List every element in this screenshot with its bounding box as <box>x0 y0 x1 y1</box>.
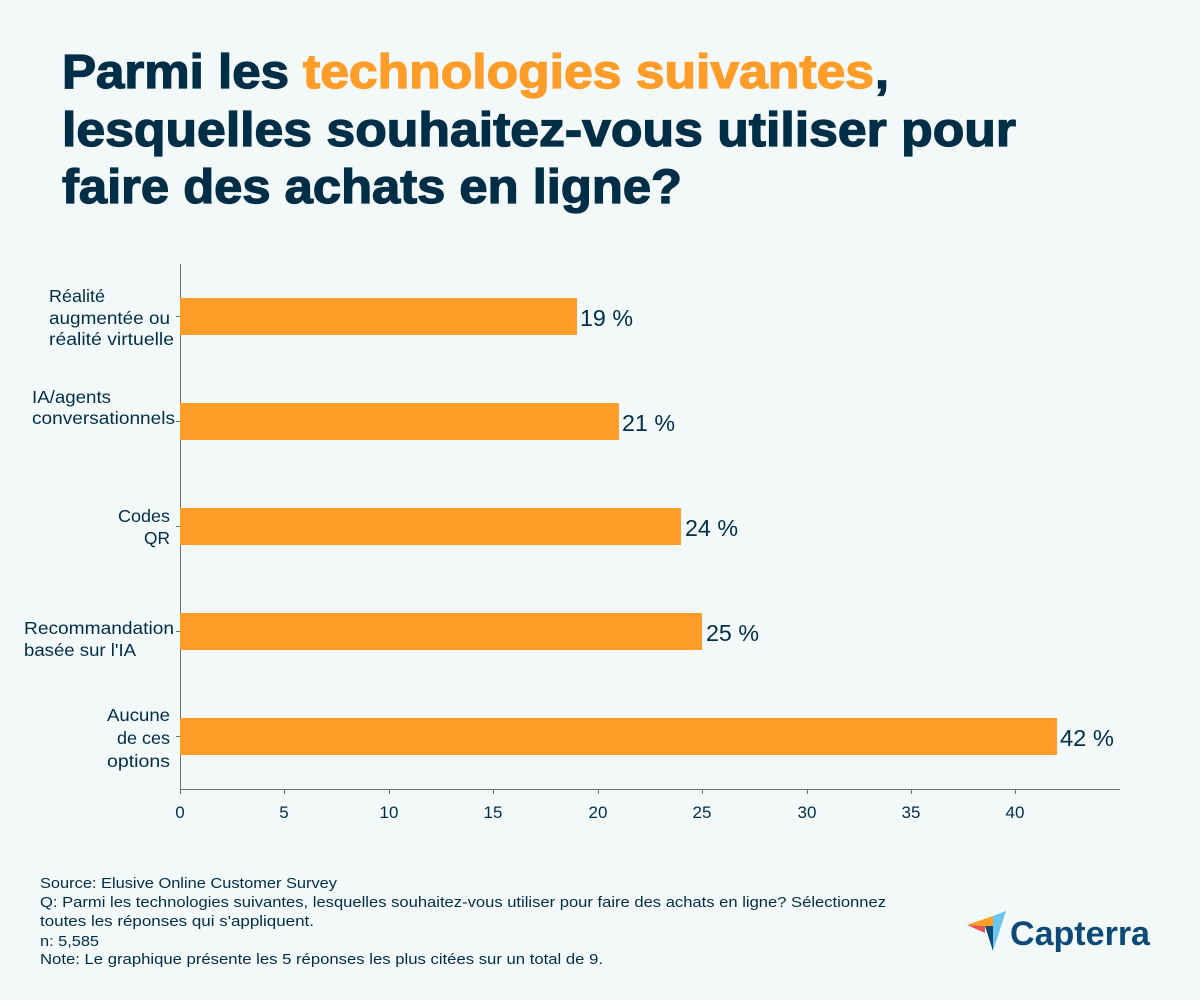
chart axes <box>176 264 1120 794</box>
bar: IA/agents <box>32 387 675 440</box>
source notes: Note: Le graphique présente les 5 réponses les plus citées sur un total de 9. <box>40 951 603 968</box>
bar: IA/agents: conversationnels <box>32 408 175 428</box>
bar: codes QR: QR <box>144 528 170 548</box>
title: , <box>875 46 889 99</box>
x axis labels <box>175 803 1024 822</box>
bar: recommandation: basée sur l'IA <box>24 640 136 660</box>
bar: IA/agents: IA/agents <box>32 387 111 407</box>
bar: aucune: 42 % <box>1060 725 1114 751</box>
bar: réalité augmentée <box>49 286 633 349</box>
x axis labels: 0 <box>175 803 185 822</box>
title: technologies suivantes <box>303 46 874 99</box>
icon: Capterra arrow <box>967 911 1006 951</box>
bar: recommandation: 25 % <box>706 620 759 646</box>
bar: réalité augmentée: réalité virtuelle <box>49 329 174 349</box>
x axis labels: 10 <box>380 803 398 822</box>
x axis labels: 30 <box>798 803 816 822</box>
source notes: Source: Elusive Online Customer Survey <box>40 875 338 892</box>
source notes <box>40 875 886 968</box>
x axis labels: 25 <box>693 803 711 822</box>
bar: recommandation <box>24 613 759 660</box>
bar: réalité augmentée: augmentée ou <box>49 308 170 328</box>
x axis labels: 20 <box>589 803 607 822</box>
bar: aucune: options <box>107 751 170 771</box>
source notes: toutes les réponses qui s'appliquent. <box>40 913 314 930</box>
source notes: n: 5,585 <box>40 933 99 950</box>
x axis labels: 15 <box>484 803 502 822</box>
bar chart <box>24 264 1120 822</box>
bar: aucune: de ces <box>117 728 170 748</box>
x axis labels: 5 <box>279 803 289 822</box>
bar: codes QR <box>118 506 738 548</box>
bar: IA/agents: 21 % <box>622 410 675 436</box>
title: faire des achats en ligne? <box>62 161 682 214</box>
title: lesquelles souhaitez-vous utiliser pour <box>62 104 1016 157</box>
source notes: Q: Parmi les technologies suivantes, lesquelles souhaitez-vous utiliser pour faire des achats en ligne? Sélectionnez <box>40 894 886 911</box>
bar: codes QR: 24 % <box>685 515 738 541</box>
bar: aucune <box>107 705 1114 771</box>
x axis labels: 35 <box>902 803 920 822</box>
title: Parmi les <box>62 46 289 99</box>
title <box>62 46 1016 214</box>
logo: Capterra: Capterra <box>1010 915 1151 953</box>
bar: recommandation: Recommandation <box>24 618 174 638</box>
bar: réalité augmentée: 19 % <box>580 305 633 331</box>
logo: Capterra <box>967 911 1151 953</box>
bar: aucune: Aucune <box>107 705 170 725</box>
x axis labels: 40 <box>1006 803 1024 822</box>
bar: réalité augmentée: Réalité <box>49 286 105 306</box>
bar: codes QR: Codes <box>118 506 170 526</box>
